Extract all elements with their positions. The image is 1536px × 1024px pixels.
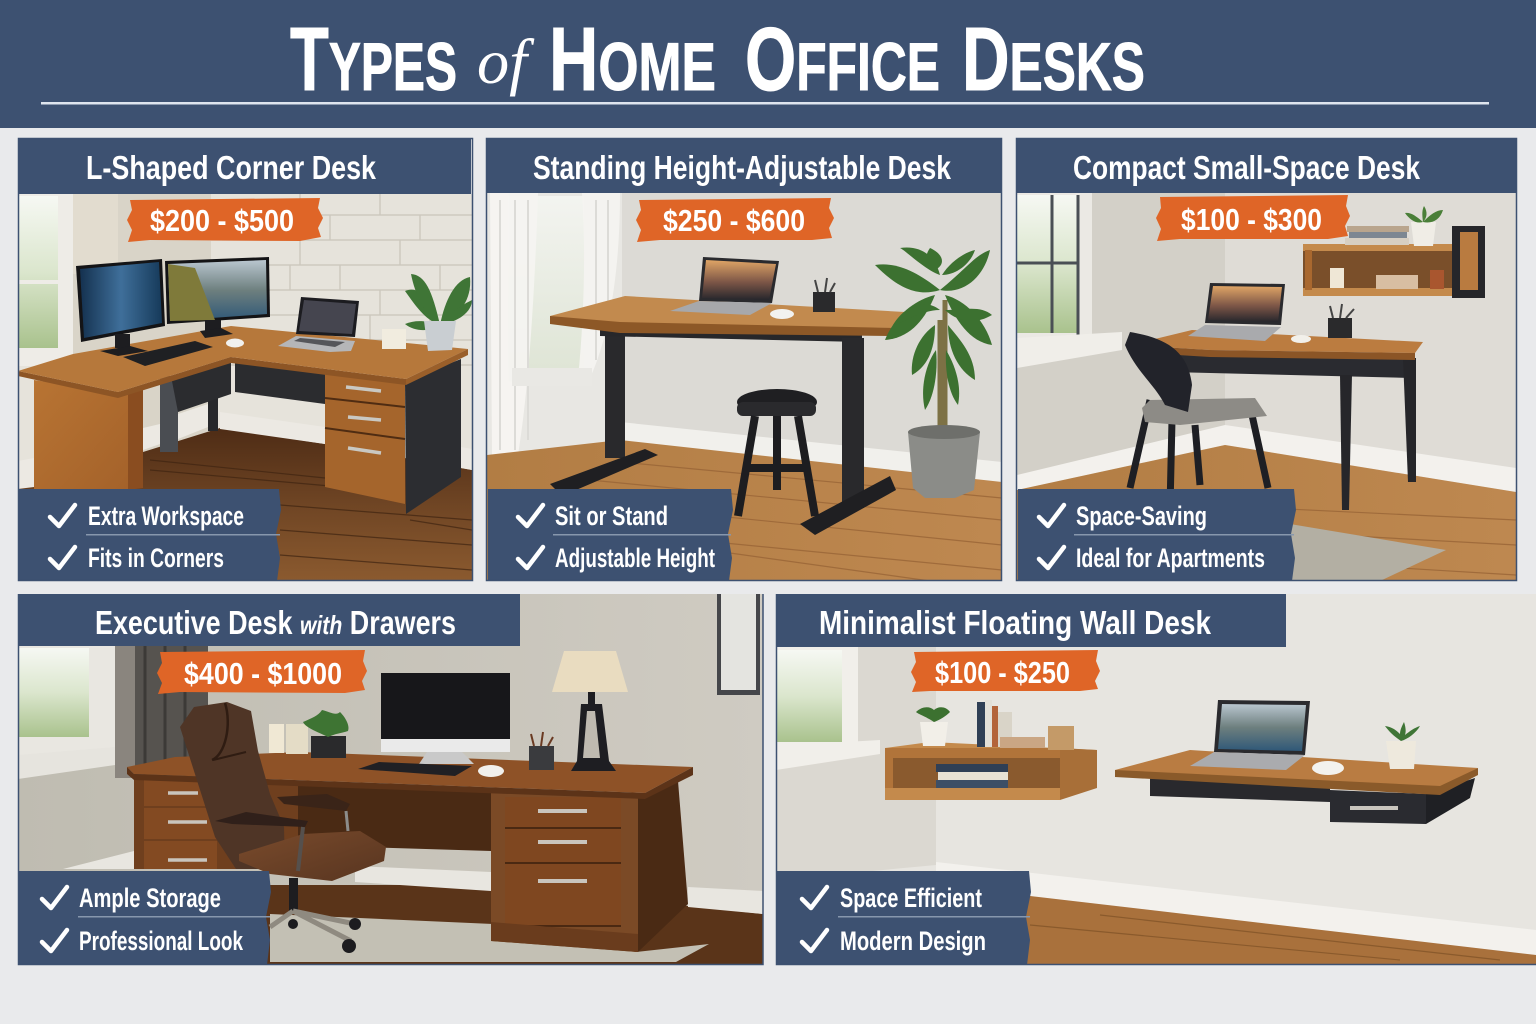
feature list: Space-Saving xyxy=(1076,501,1207,531)
heading xyxy=(486,138,1001,193)
curtain xyxy=(115,646,208,778)
laptop and desk items xyxy=(1190,700,1420,775)
title banner xyxy=(0,0,1536,128)
scene: executive office xyxy=(18,594,763,965)
monitor and desk items xyxy=(269,673,554,777)
title: OFFICE xyxy=(745,10,940,110)
floating shelf xyxy=(885,700,1097,800)
price tag: $100 - $250 xyxy=(935,655,1070,690)
title: of xyxy=(477,26,535,97)
panel: executive desk with drawers xyxy=(18,594,763,965)
floor and baseboards xyxy=(63,851,763,965)
price tag: $200 - $500 xyxy=(150,203,294,238)
price tag xyxy=(636,198,834,242)
price tag: $400 - $1000 xyxy=(184,656,342,691)
stool xyxy=(737,389,817,516)
price tag xyxy=(1156,195,1350,241)
title: DESKS xyxy=(962,10,1145,110)
title: HOME xyxy=(549,10,716,110)
scene: standing desk room xyxy=(487,193,1002,581)
panel: L-shaped corner desk xyxy=(18,138,472,581)
plant and cube xyxy=(382,274,472,351)
table lamp xyxy=(552,651,628,771)
feature list xyxy=(18,489,281,581)
scene: compact desk room xyxy=(1017,193,1516,581)
feature list: Sit or Stand xyxy=(555,501,668,531)
feature list xyxy=(488,489,733,581)
heading xyxy=(18,594,520,646)
price tag: $100 - $300 xyxy=(1181,202,1322,237)
title xyxy=(290,10,1145,110)
feature list: Space Efficient xyxy=(840,883,982,913)
scene: floating desk room xyxy=(776,594,1536,965)
feature list: Professional Look xyxy=(79,926,244,956)
heading xyxy=(1016,138,1516,193)
price tag xyxy=(157,650,367,694)
heading: Executive Desk with Drawers xyxy=(95,604,456,641)
wall shelf xyxy=(1303,206,1485,298)
compact desk xyxy=(1130,283,1423,510)
feature list: Ideal for Apartments xyxy=(1076,543,1265,573)
feature list xyxy=(18,871,271,965)
rug xyxy=(1290,524,1446,581)
feature list xyxy=(1018,489,1296,581)
feature list: Extra Workspace xyxy=(88,501,244,531)
heading xyxy=(776,594,1286,647)
monitors and laptop xyxy=(76,257,359,366)
heading: Standing Height-Adjustable Desk xyxy=(533,149,952,186)
feature list: Ample Storage xyxy=(79,883,221,913)
feature list: Fits in Corners xyxy=(88,543,224,573)
standing desk xyxy=(550,296,905,535)
scene: L-shaped desk room xyxy=(18,194,472,581)
plant xyxy=(875,247,992,498)
wall frame xyxy=(717,594,760,695)
feature list xyxy=(776,871,1031,965)
feature list: Adjustable Height xyxy=(555,543,715,573)
price tag xyxy=(127,198,323,242)
laptop and desk items xyxy=(670,257,835,319)
heading xyxy=(18,138,471,194)
chair xyxy=(1125,332,1268,508)
heading: L-Shaped Corner Desk xyxy=(86,149,377,186)
panel: compact small-space desk xyxy=(1016,138,1516,581)
executive desk xyxy=(127,752,693,952)
heading: Minimalist Floating Wall Desk xyxy=(819,604,1212,641)
floor xyxy=(18,428,472,581)
corner desk xyxy=(18,326,468,514)
panel: minimalist floating wall desk xyxy=(776,594,1536,965)
rug xyxy=(270,914,709,962)
panel: standing height-adjustable desk xyxy=(486,138,1002,581)
heading: Compact Small-Space Desk xyxy=(1073,149,1421,186)
office chair xyxy=(180,702,386,953)
feature list: Modern Design xyxy=(840,926,986,956)
title: TYPES xyxy=(290,10,457,110)
floating desk xyxy=(1115,750,1478,824)
price tag: $250 - $600 xyxy=(663,203,805,238)
